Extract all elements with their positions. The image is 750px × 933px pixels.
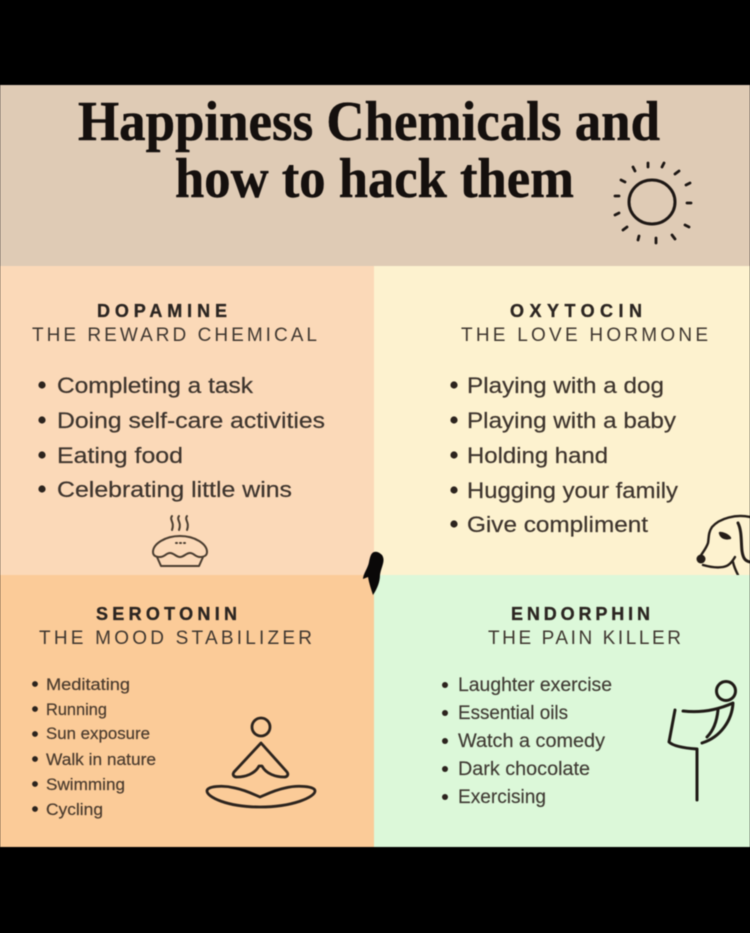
endorphin list: Exercising	[458, 787, 546, 808]
endorphin subtitle: THE PAIN KILLER	[488, 628, 681, 649]
oxytocin list: Holding hand	[467, 443, 608, 468]
panel: dopamine	[0, 266, 374, 575]
dopamine list: Celebrating little wins	[57, 477, 292, 502]
oxytocin list: Playing with a dog	[467, 373, 664, 398]
serotonin list: Walk in nature	[46, 750, 156, 769]
serotonin list: Running	[46, 700, 107, 719]
serotonin list: Meditating	[46, 675, 130, 694]
panel: oxytocin	[374, 266, 750, 575]
oxytocin heading: OXYTOCIN	[510, 301, 642, 321]
endorphin list: Watch a comedy	[458, 731, 606, 752]
serotonin subtitle: THE MOOD STABILIZER	[39, 628, 312, 649]
icon: pie	[153, 516, 207, 566]
endorphin list	[442, 675, 612, 808]
serotonin list: Cycling	[46, 800, 103, 819]
dopamine list: Eating food	[57, 443, 183, 468]
oxytocin list: Hugging your family	[467, 478, 679, 503]
icon: dog	[696, 516, 750, 575]
endorphin list: Essential oils	[458, 703, 568, 724]
icon: meditating figure	[207, 718, 315, 807]
dopamine heading: DOPAMINE	[97, 301, 227, 321]
endorphin list: Laughter exercise	[458, 675, 612, 696]
endorphin heading: ENDORPHIN	[511, 604, 650, 624]
icon: sun	[615, 163, 691, 243]
dopamine list: Completing a task	[57, 373, 254, 398]
icon: yoga pose figure	[669, 682, 736, 800]
serotonin heading: SEROTONIN	[96, 604, 237, 624]
dopamine list	[38, 373, 325, 502]
title	[78, 91, 660, 210]
oxytocin list: Playing with a baby	[467, 408, 677, 433]
serotonin list: Swimming	[46, 775, 125, 794]
dopamine subtitle: THE REWARD CHEMICAL	[32, 325, 317, 346]
endorphin list: Dark chocolate	[458, 759, 590, 780]
torn black mark between panels	[363, 552, 384, 595]
title: Happiness Chemicals and	[78, 91, 660, 153]
serotonin list	[32, 675, 156, 819]
panel: endorphin	[374, 575, 750, 847]
oxytocin subtitle: THE LOVE HORMONE	[461, 325, 708, 346]
serotonin list: Sun exposure	[46, 724, 150, 743]
dopamine list: Doing self-care activities	[57, 408, 325, 433]
header panel	[0, 85, 750, 266]
panel: serotonin	[0, 575, 374, 847]
oxytocin list: Give compliment	[467, 512, 649, 537]
title: how to hack them	[175, 148, 574, 210]
oxytocin list	[450, 373, 679, 537]
